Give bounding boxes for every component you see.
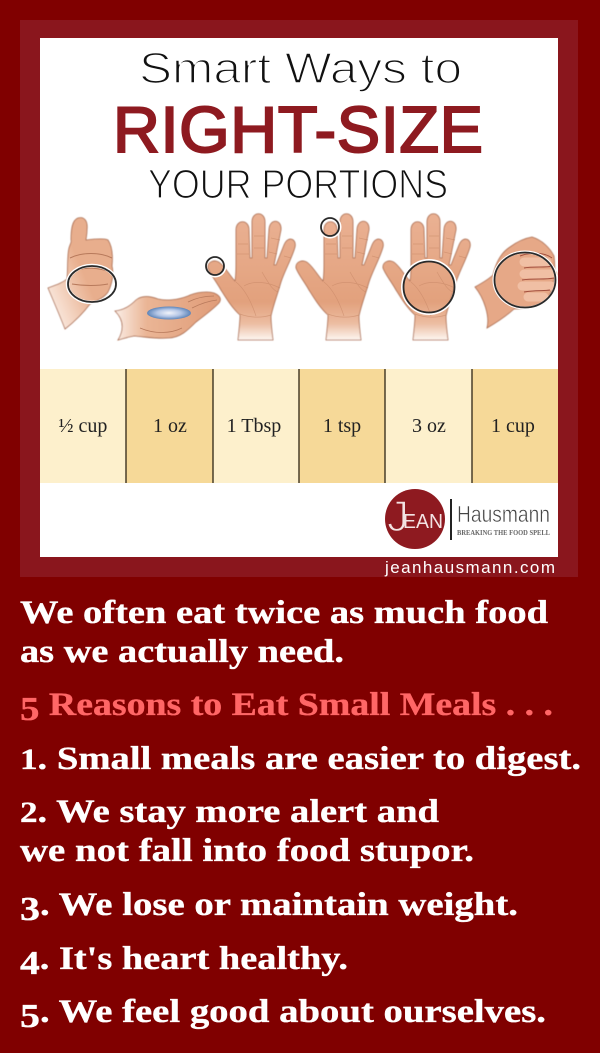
reason 4: 4 xyxy=(20,945,40,982)
title line: RIGHT-SIZE: RIGHT-SIZE xyxy=(113,93,483,166)
title xyxy=(113,44,483,207)
intro text xyxy=(20,595,548,670)
cell: 1 Tbsp xyxy=(213,369,299,483)
intro text: We often eat twice as much food xyxy=(20,595,548,631)
logo wordmark: Hausmann xyxy=(457,501,550,527)
title line: Smart Ways to: Smart Ways to xyxy=(139,44,462,93)
cell: 1 cup xyxy=(472,369,558,483)
cell: half cup: ½ cup xyxy=(59,415,107,437)
icon: cupped palm, one ounce xyxy=(115,292,220,340)
panel white card xyxy=(40,38,558,557)
title line: YOUR PORTIONS: YOUR PORTIONS xyxy=(148,161,448,207)
cell: 1 tsp xyxy=(299,369,385,483)
subheading: Reasons to Eat Small Meals . . . xyxy=(39,687,553,723)
panel: portion chart xyxy=(20,20,578,577)
icon: open hand, palm, three ounces xyxy=(383,214,470,340)
reason 5: 5 xyxy=(20,998,40,1035)
cell: 3 oz xyxy=(385,369,472,483)
logo badge xyxy=(385,489,445,549)
intro text: as we actually need. xyxy=(20,634,344,670)
cell: 1 oz: 1 oz xyxy=(153,415,187,437)
logo: Jean Hausmann xyxy=(385,489,550,549)
reason 1: 1. Small meals are easier to digest. xyxy=(20,741,581,777)
cell: 1 oz xyxy=(126,369,213,483)
cell: 1 Tbsp: 1 Tbsp xyxy=(227,415,281,437)
cell: 1 cup: 1 cup xyxy=(491,415,535,437)
logo badge text: EAN xyxy=(403,511,443,533)
icon: open hand, thumb tip, one tablespoon xyxy=(205,214,295,340)
reasons list xyxy=(20,741,581,1035)
icon: thumb, half cup xyxy=(48,218,116,329)
reason 3: . We lose or maintain weight. xyxy=(40,887,518,923)
logo badge text: J xyxy=(387,492,409,541)
subheading: 5 xyxy=(20,691,39,728)
measurement table xyxy=(40,369,558,483)
hand illustrations xyxy=(48,214,556,340)
cell: 1 tsp: 1 tsp xyxy=(323,415,361,437)
reason 5: . We feel good about ourselves. xyxy=(40,994,546,1030)
logo tagline: BREAKING THE FOOD SPELL xyxy=(457,529,550,537)
reason 3: 3 xyxy=(20,891,40,928)
cell: half cup xyxy=(40,369,126,483)
reason 2: we not fall into food stupor. xyxy=(20,833,474,869)
reason 4: . It's heart healthy. xyxy=(40,941,348,977)
website url: jeanhausmann.com xyxy=(384,558,555,577)
icon: closed fist, one cup xyxy=(475,237,556,328)
panel frame xyxy=(20,20,578,577)
reason 2 xyxy=(20,794,474,869)
cell: 3 oz: 3 oz xyxy=(412,415,446,437)
reason 2: 2. We stay more alert and xyxy=(20,794,439,830)
icon: open hand, fingertip, one teaspoon xyxy=(296,214,383,340)
